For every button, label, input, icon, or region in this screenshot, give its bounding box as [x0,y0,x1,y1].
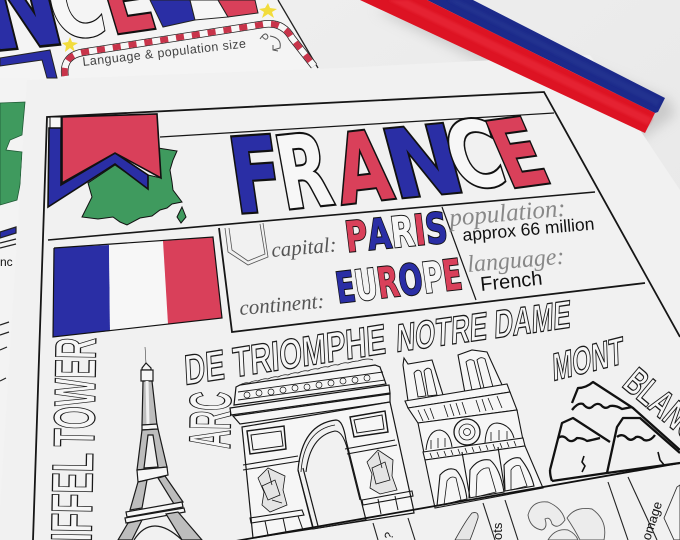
title: C [432,101,517,211]
bottom row of food items [230,463,680,540]
title: A [326,110,399,227]
Notre Dame drawing [403,350,543,508]
croissants [528,502,605,540]
label: Eiffel Tower: TOWER [42,337,109,447]
left back sheet [0,78,30,540]
back blue frame [0,50,57,78]
back label: Language & population size [82,36,247,69]
capital label: capital: [270,232,338,262]
population label: population: [446,195,567,232]
label: De Triomphe: DE TRIOMPHE [183,315,387,394]
red marker [360,0,655,133]
tab icon [225,223,268,265]
Mont Blanc drawing [550,382,680,481]
page border [33,92,680,540]
arch opening [298,420,366,529]
curly arrow [260,34,280,51]
cheese wedge [664,485,680,540]
candy stripe frame [65,24,314,76]
back stripes [0,227,16,381]
language label: language: [466,244,565,278]
title: F [222,115,290,238]
label: Notre Dame: NOTRE DAME [396,292,572,361]
title: E [473,98,563,209]
left sculpture [258,468,287,512]
bases [250,491,413,523]
back flag [150,0,258,27]
stars [62,3,277,52]
French flag [53,237,222,337]
pen shadow [375,10,675,140]
label: haricots: ots [490,522,505,540]
continent value: EUROPE [333,251,465,314]
back title letters [0,0,167,79]
back map [0,102,25,205]
cornices [243,440,397,470]
Arc de Triomphe drawing [230,359,414,538]
Eiffel Tower drawing [118,347,202,540]
title [222,98,563,238]
right sculpture [367,450,397,494]
title: R [268,113,340,233]
left panel [247,426,286,454]
blue marker [427,0,665,113]
front worksheet: ARC [177,391,244,449]
left back sheet: nc [0,255,13,269]
baguette [455,513,478,540]
population value: approx 66 million [462,214,595,245]
banner [48,114,161,207]
capital value: PARIS [342,203,450,262]
title: N [372,104,475,220]
back worksheet top [0,0,320,110]
right panel [350,411,388,437]
continent label: continent: [238,289,325,320]
label: Mont: MONT [552,329,624,390]
map of France [82,148,186,225]
language value: French [479,268,543,296]
